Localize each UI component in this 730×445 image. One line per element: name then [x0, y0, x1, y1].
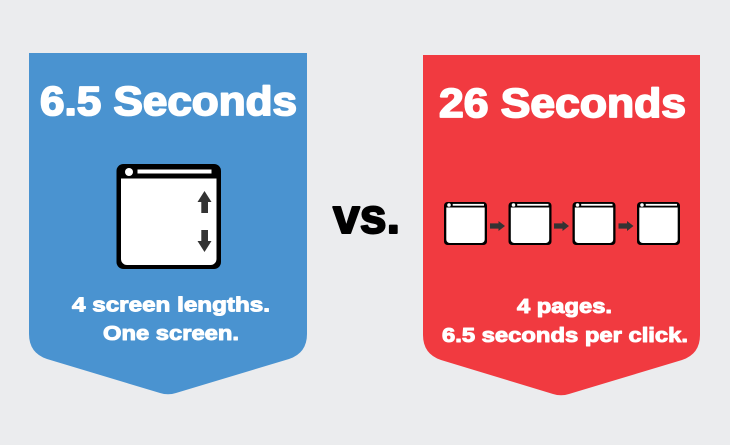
- icon: browser window with scroll arrows: [116, 164, 221, 269]
- icon: four browser windows with arrows: [444, 202, 680, 245]
- heading: 6.5 Seconds: 6.5 Seconds: [40, 78, 297, 124]
- heading: 26 Seconds: 26 Seconds: [439, 80, 686, 126]
- caption: pagination: 4 pages.: [517, 295, 612, 318]
- label: vs.: vs.: [333, 190, 400, 244]
- panel: blue scroll: [29, 53, 307, 394]
- panel: red pagination: [423, 55, 700, 395]
- caption: pagination: 6.5 seconds per click.: [442, 324, 688, 347]
- caption: scroll: 4 screen lengths.: [72, 294, 270, 316]
- caption: scroll: One screen.: [103, 322, 239, 345]
